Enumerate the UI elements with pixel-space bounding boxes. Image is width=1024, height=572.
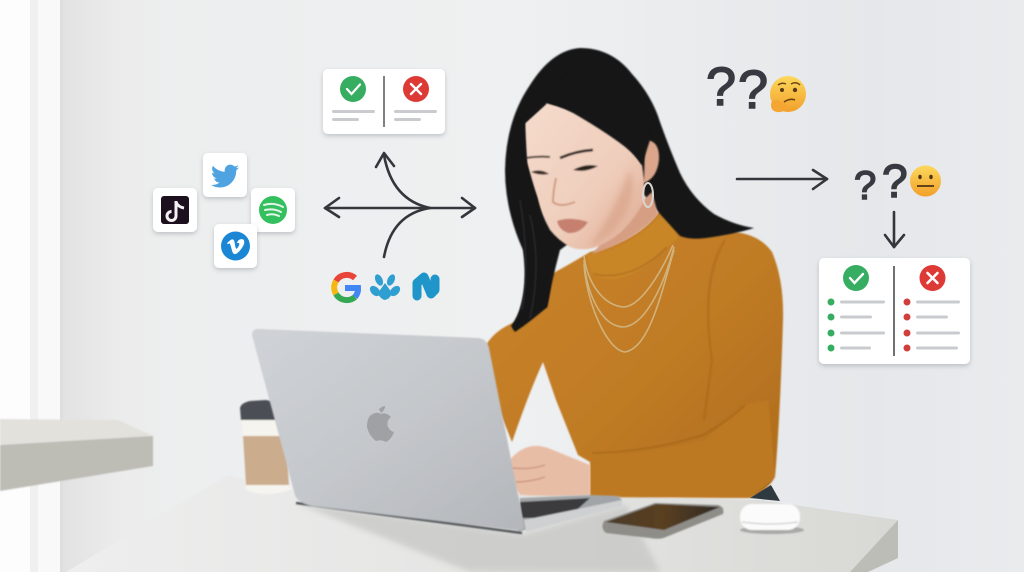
emoji: neutral face (910, 166, 941, 196)
left concrete shelf (0, 419, 153, 491)
icon: spotify tile (251, 188, 295, 232)
question marks top (706, 57, 768, 120)
dark belt (750, 485, 780, 501)
hoop earring (643, 183, 653, 207)
icon: blue lotus logo (368, 273, 402, 300)
pros list (828, 298, 885, 352)
hand on keyboard (508, 446, 590, 496)
cons list (904, 298, 960, 352)
laptop base (518, 495, 622, 532)
lips (557, 219, 588, 233)
hair front strands (508, 58, 650, 330)
apple logo (367, 406, 394, 442)
earbuds case (740, 504, 804, 534)
icon: tiktok tile (153, 188, 197, 232)
laptop (252, 329, 622, 533)
cheek shading (590, 170, 633, 246)
nose shadow (553, 178, 575, 205)
small comparison card (323, 69, 445, 134)
question marks middle (854, 155, 908, 208)
sweater torso and arms (486, 210, 783, 498)
phone (602, 503, 723, 539)
main table (66, 475, 898, 572)
icon: google logo (334, 275, 358, 300)
question marks top: ? (706, 57, 736, 117)
eyes (531, 170, 549, 175)
cross icon (920, 265, 946, 291)
arrow: down (885, 212, 904, 247)
arrow: branching paths (325, 153, 475, 257)
question marks middle: ? (882, 155, 908, 207)
question marks top: ? (738, 60, 768, 120)
eyebrows (525, 157, 550, 158)
laptop lid (252, 329, 524, 533)
cross icon (403, 76, 429, 102)
icon: vimeo tile (214, 224, 257, 268)
arrow: right (737, 170, 827, 189)
icon: blue N logo (417, 277, 435, 296)
necklaces (584, 245, 674, 352)
face and neck (525, 103, 659, 254)
ear (644, 140, 659, 183)
check icon (340, 76, 366, 102)
coffee cup (240, 400, 290, 494)
emoji: thinking face (770, 76, 806, 112)
hair back (505, 48, 754, 332)
person (486, 48, 783, 501)
question marks middle: ? (854, 164, 876, 208)
check icon (843, 265, 869, 291)
large comparison card (819, 258, 970, 364)
icon: twitter tile (203, 153, 247, 197)
